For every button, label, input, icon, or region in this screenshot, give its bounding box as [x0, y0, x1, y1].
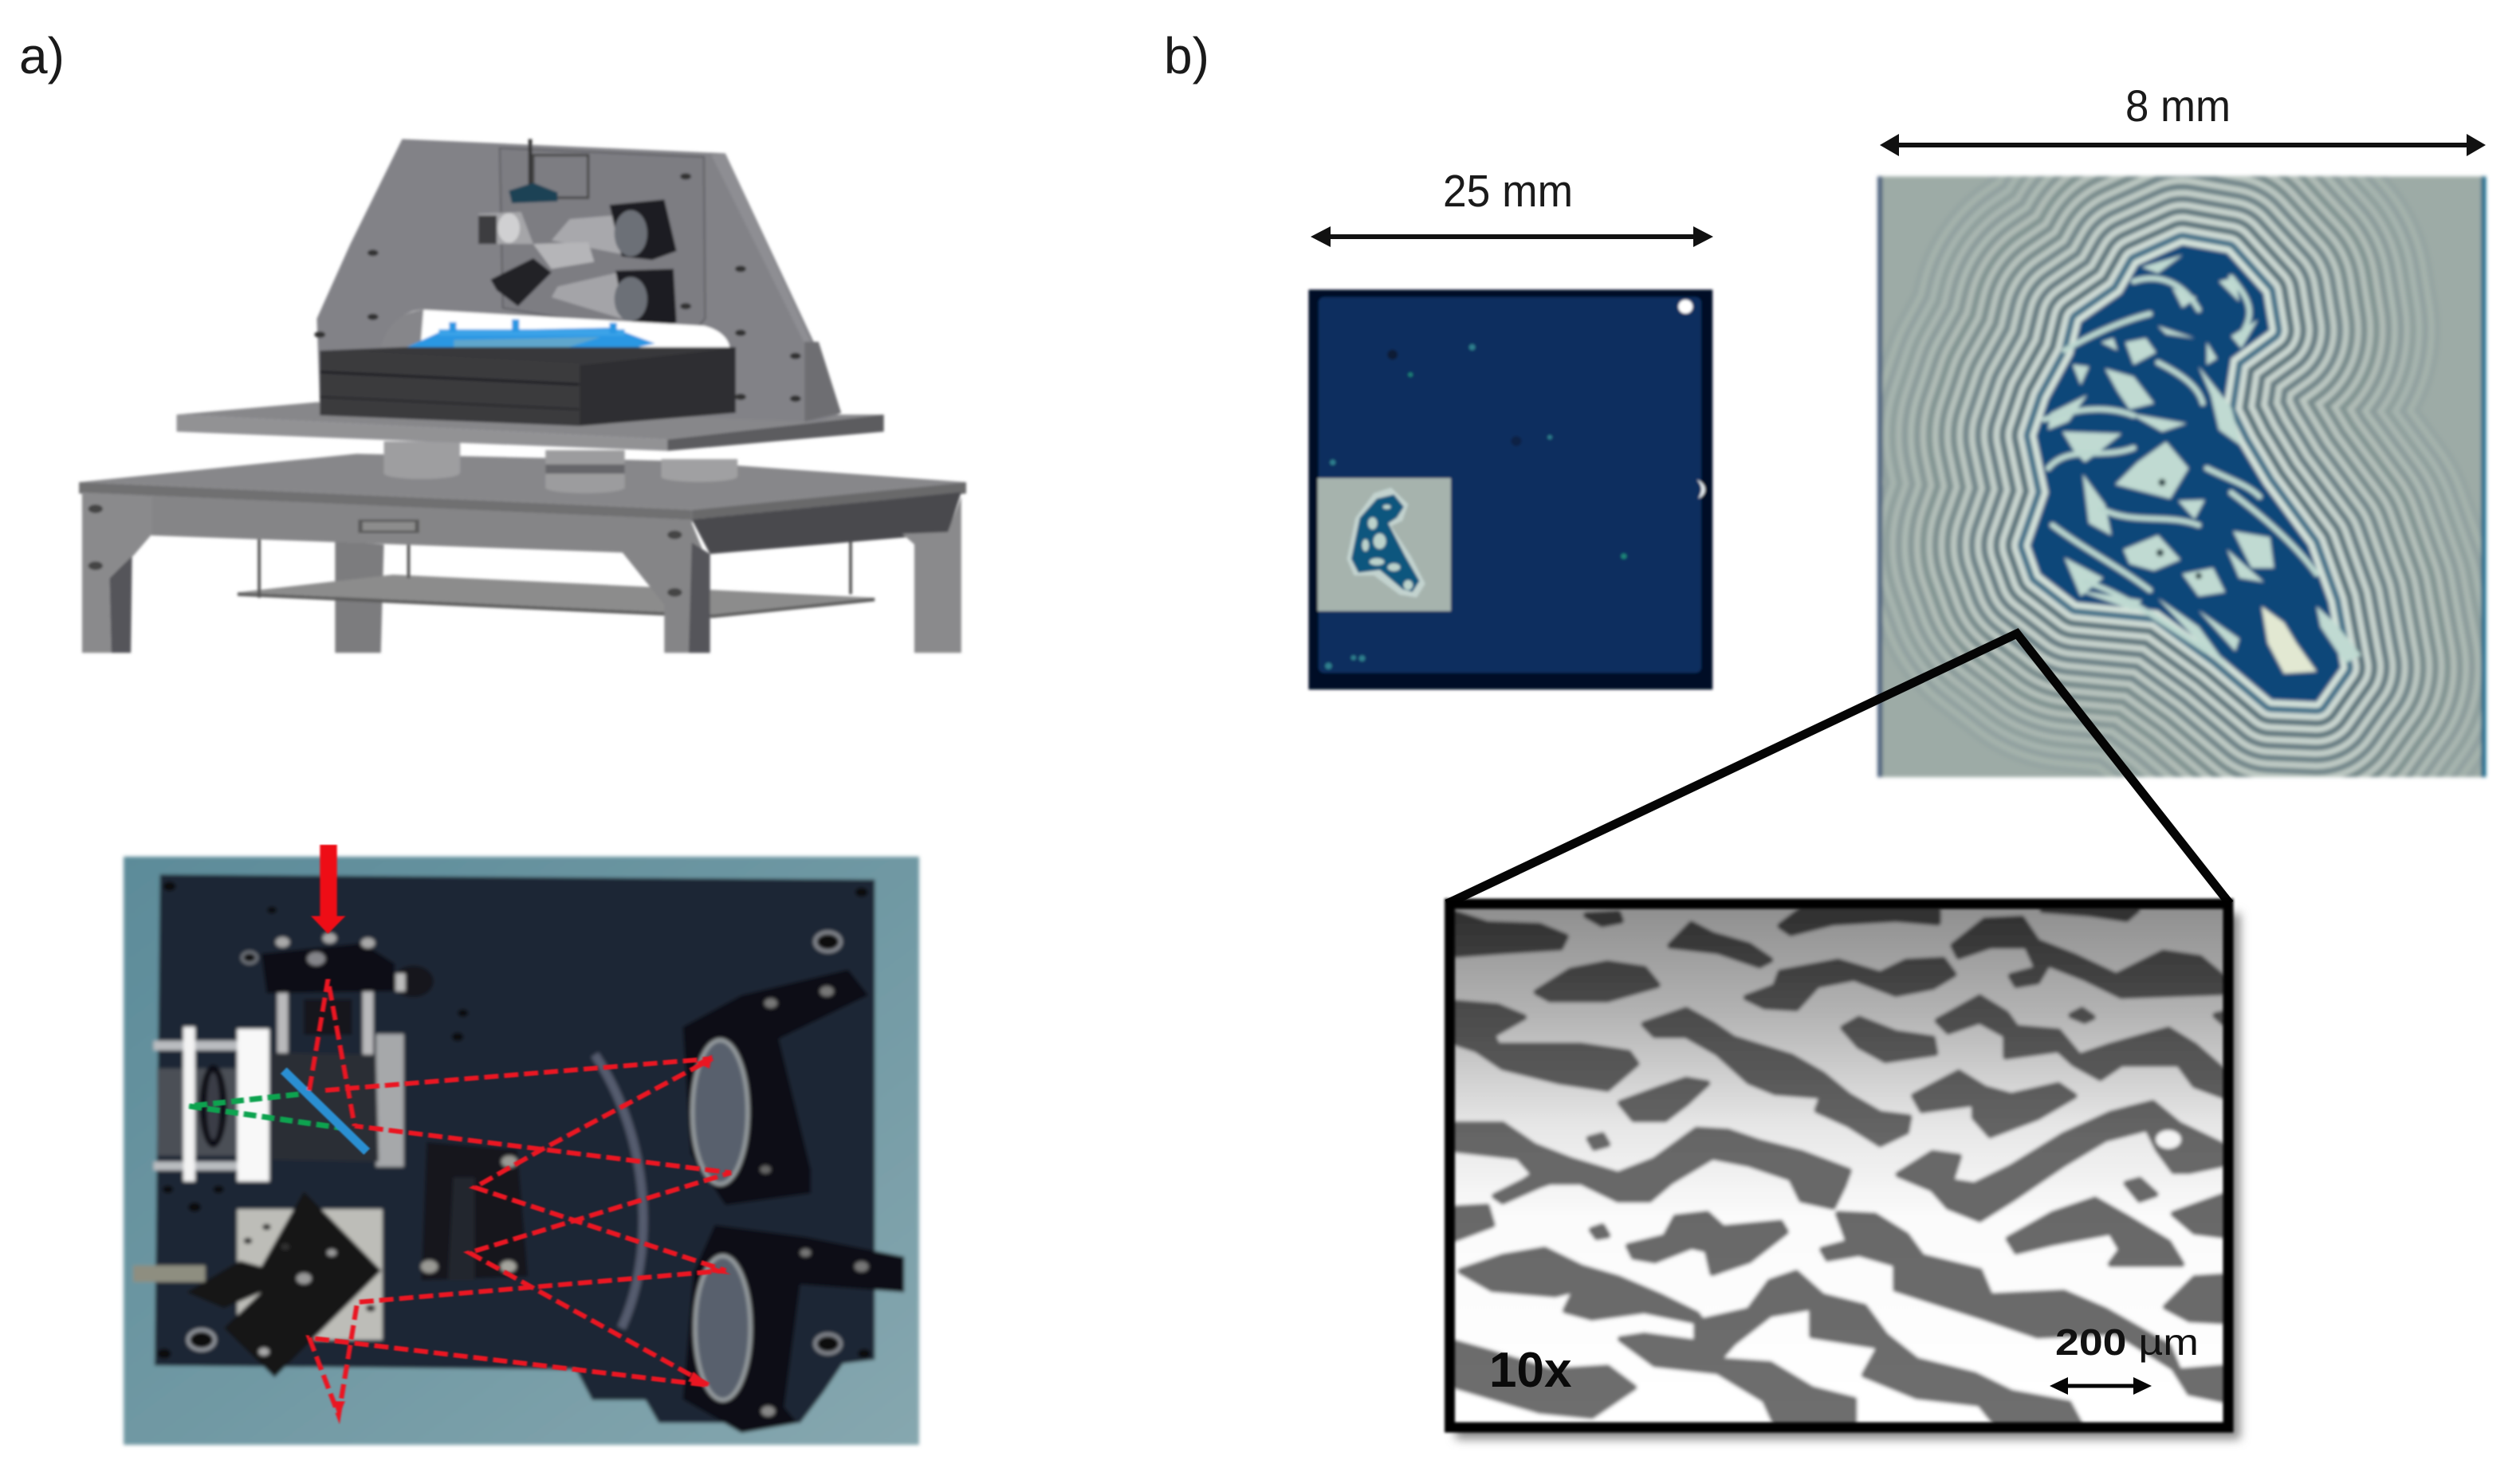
- label: panel a: a): [19, 27, 65, 84]
- faint reflection on plate: [595, 1054, 643, 1328]
- green return beam: [189, 1094, 341, 1128]
- lower adjustable stage: [133, 1191, 383, 1377]
- light patches in structure: [2048, 255, 2361, 671]
- back plate: [314, 139, 841, 422]
- upper lens mount and rails: [261, 933, 434, 1167]
- hologram background: [1877, 176, 2485, 777]
- 25 mm dimension label: 25 mm: [1443, 166, 1573, 217]
- photograph of optical bench with beam path: [124, 845, 919, 1445]
- blue beam splitter: [284, 1070, 367, 1152]
- bright hole in domain: [2156, 1130, 2181, 1148]
- optics on plate: [478, 139, 677, 333]
- plate holes: [157, 881, 871, 1359]
- zoom callout lines: [1447, 634, 2230, 904]
- inset background: [1449, 904, 2228, 1427]
- back leg: [335, 541, 384, 653]
- sample substrate: [1308, 289, 1712, 689]
- lower shelf: [238, 536, 875, 618]
- table apron and legs: [82, 493, 961, 653]
- red dashed beam path: [309, 979, 731, 1415]
- curved light bands in structure: [2044, 277, 2317, 651]
- upper mirror mount: [682, 969, 868, 1205]
- central folding mount: [421, 1142, 528, 1281]
- red input arrow: [311, 845, 345, 934]
- table top: [79, 453, 966, 522]
- magnified reconstructed hologram: [1877, 176, 2486, 777]
- bright core of lower lobe: [2262, 606, 2317, 673]
- white camera block: [154, 1027, 269, 1181]
- dark labyrinth domains: [1454, 910, 2223, 1423]
- 25 mm dimension arrow: [1311, 226, 1713, 247]
- dark box: [320, 347, 736, 426]
- lower mirror mount: [682, 1225, 904, 1433]
- platform: [176, 402, 884, 451]
- blue spectrometer parts: [399, 320, 655, 361]
- shadow of microscope inset: [1456, 913, 2240, 1439]
- magnification label: 10x: [1489, 1343, 1572, 1398]
- red arrowheads: [333, 1054, 731, 1417]
- dark spots: [2156, 479, 2202, 579]
- scale bar arrow: [2050, 1377, 2152, 1395]
- sample overview image: [1308, 289, 1712, 689]
- CAD rendering of instrument on table: [79, 139, 966, 653]
- detector housing: [272, 1053, 379, 1162]
- white opening arch: [381, 310, 729, 347]
- concentric interference fringes following the outline: [2030, 245, 2341, 702]
- inset frame: [1449, 904, 2228, 1427]
- microscope inset: [1449, 904, 2228, 1427]
- dark blue structure: [2030, 245, 2341, 702]
- cylindrical isolators: [384, 442, 737, 493]
- label: panel b: b): [1164, 27, 1209, 84]
- mounting plate: [155, 874, 875, 1423]
- scale bar label: 200 µm: [2055, 1321, 2199, 1363]
- hologram side edges: [2481, 176, 2486, 777]
- defects and specks: [1325, 300, 1705, 669]
- 8 mm dimension arrow: [1880, 134, 2486, 156]
- 8 mm dimension label: 8 mm: [2125, 80, 2231, 131]
- bench background: [124, 857, 919, 1445]
- recorded hologram patch: [1318, 478, 1451, 611]
